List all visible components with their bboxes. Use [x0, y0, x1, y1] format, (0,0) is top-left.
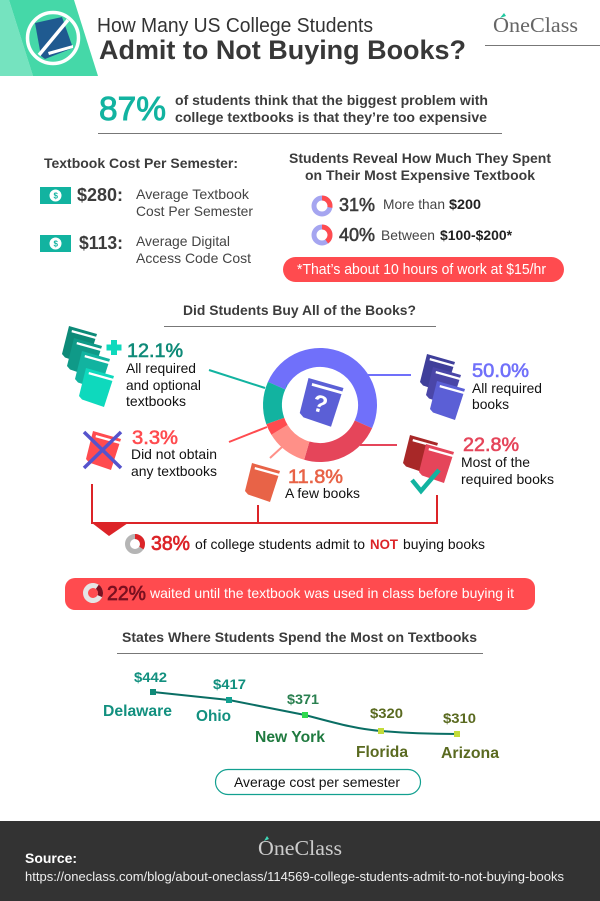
heading: students reveal: Students Reveal How Much They Spent — [289, 150, 551, 166]
icon: red books with check — [403, 435, 455, 491]
logo: OneClass top — [485, 13, 600, 46]
callout: 10 hours of work — [283, 257, 564, 282]
state names: Arizona — [441, 745, 499, 762]
values: $320 — [370, 705, 403, 721]
stat: 31% more than $200: 31% — [339, 195, 375, 215]
leader lines — [209, 370, 411, 458]
bracket: non-buyers — [92, 484, 437, 536]
icon: crossed-out book — [84, 431, 122, 470]
stat: 38% not buying: of college students admit to — [195, 536, 365, 552]
state names: New York — [255, 729, 325, 746]
values: $442 — [134, 669, 167, 685]
donut: 22% — [83, 583, 103, 603]
label: 3.3%: Did not obtain — [131, 446, 217, 462]
cost: $280: Average Textbook — [136, 186, 250, 202]
cost: $113: Access Code Cost — [136, 250, 251, 266]
values: $417 — [213, 676, 246, 692]
icon: question book: ? — [309, 390, 331, 419]
label: 22.8%: Most of the — [461, 454, 530, 470]
cost: $280 — [77, 185, 253, 219]
icon: money bill 1 — [40, 187, 71, 204]
donut chart: book purchases — [257, 342, 383, 468]
stat: 87%: of students think that the biggest problem with — [175, 92, 488, 108]
state names: Florida — [356, 744, 408, 761]
heading: students reveal: on Their Most Expensive Textbook — [305, 167, 535, 183]
label: 22.8%: 22.8% — [463, 435, 519, 456]
label: 12.1%: and optional — [126, 377, 201, 393]
values: $371 — [287, 691, 319, 707]
donut: 31% — [314, 198, 330, 214]
donut: 40% — [314, 227, 330, 243]
state names: Delaware — [103, 703, 172, 720]
callout: 22% waited — [65, 578, 535, 610]
stat: 31% more than $200 — [339, 195, 481, 215]
values: $310 — [443, 710, 476, 726]
callout: 10 hours of work: *That’s about 10 hours of work at $15/hr — [297, 262, 546, 278]
cost: $113 — [79, 233, 251, 266]
title: Admit to Not Buying Books? — [99, 35, 466, 65]
cost: $280: Cost Per Semester — [136, 203, 253, 219]
label: 11.8%: 11.8% — [288, 467, 343, 488]
stat: 87%: college textbooks is that they’re too expensive — [175, 109, 487, 125]
label: 22.8%: required books — [461, 471, 554, 487]
donut: 38% — [128, 536, 142, 552]
title: How Many US College Students — [97, 15, 373, 37]
source — [25, 850, 564, 884]
label: 50.0%: All required — [472, 380, 542, 396]
stat: 38% not buying: 38% — [151, 533, 190, 555]
state names — [103, 703, 499, 762]
source: Source: — [25, 850, 77, 866]
stat: 40% between $100-$200: 40% — [339, 225, 375, 245]
label: 3.3% — [131, 428, 217, 479]
panel: textbook cost per semester — [40, 155, 253, 266]
label: 50.0%: 50.0% — [472, 361, 529, 382]
stat: 87%: 87% — [99, 90, 166, 127]
legend pill: Average cost per semester — [234, 774, 400, 790]
cost: $113: Average Digital — [136, 233, 230, 249]
label: 12.1%: All required — [126, 360, 196, 376]
stat: 87% — [98, 90, 502, 134]
label: 12.1%: 12.1% — [127, 341, 183, 362]
heading: textbook cost: Textbook Cost Per Semester: — [44, 155, 238, 171]
icon: question book — [300, 378, 345, 427]
line chart: state spending — [103, 669, 499, 762]
icon: purple book stack — [420, 354, 466, 420]
label: 22.8% — [461, 435, 554, 487]
label: 11.8% — [285, 467, 360, 501]
cost: $113: $113: — [79, 233, 123, 253]
label: 3.3%: 3.3% — [132, 428, 178, 449]
heading: did students buy all of the books: Did Students Buy All of the Books? — [183, 302, 416, 318]
state names: Ohio — [196, 708, 231, 725]
footer — [0, 821, 600, 901]
cost: $280: $280: — [77, 185, 123, 205]
values — [134, 669, 476, 726]
callout: 22% waited: waited until the textbook was used in class before buying it — [149, 585, 514, 601]
stat: 40% between $100-$200 — [339, 225, 513, 245]
icon: single book — [245, 463, 281, 502]
icon: money bill 2: $ — [54, 240, 58, 248]
label: 50.0% — [472, 361, 542, 412]
stat: 40% between $100-$200: $100-$200* — [440, 227, 513, 243]
panel: most expensive textbook — [283, 150, 564, 282]
label: 11.8%: A few books — [285, 485, 360, 501]
icon: money bill 1: $ — [54, 192, 58, 200]
stat: 40% between $100-$200: Between — [381, 227, 435, 243]
stat: 38% not buying — [151, 533, 485, 555]
icon: crossed-out book — [28, 12, 78, 64]
icon: teal book stack — [62, 326, 115, 407]
logo: OneClass top: OneClass — [493, 13, 578, 37]
legend pill — [216, 770, 420, 794]
logo: OneClass footer: OneClass — [258, 836, 342, 860]
stat: 31% more than $200: More than — [383, 196, 445, 212]
header banner — [0, 0, 98, 76]
label: 12.1% — [126, 341, 201, 409]
label: 12.1%: textbooks — [126, 393, 186, 409]
icon: plus — [106, 340, 122, 355]
stat: 31% more than $200: $200 — [449, 196, 481, 212]
source: https://oneclass.com/blog/about-oneclass/114569-college-students-admit-to-not-buying-books — [25, 869, 564, 884]
title — [97, 15, 466, 65]
heading: states: States Where Students Spend the Most on Textbooks — [122, 629, 477, 645]
stat: 38% not buying: NOT — [370, 536, 398, 552]
callout: 22% waited: 22% — [107, 583, 146, 605]
icon: money bill 2 — [40, 235, 71, 252]
label: 50.0%: books — [472, 396, 509, 412]
label: 3.3%: any textbooks — [131, 463, 217, 479]
stat: 38% not buying: buying books — [403, 536, 485, 552]
heading: students reveal — [289, 150, 551, 183]
